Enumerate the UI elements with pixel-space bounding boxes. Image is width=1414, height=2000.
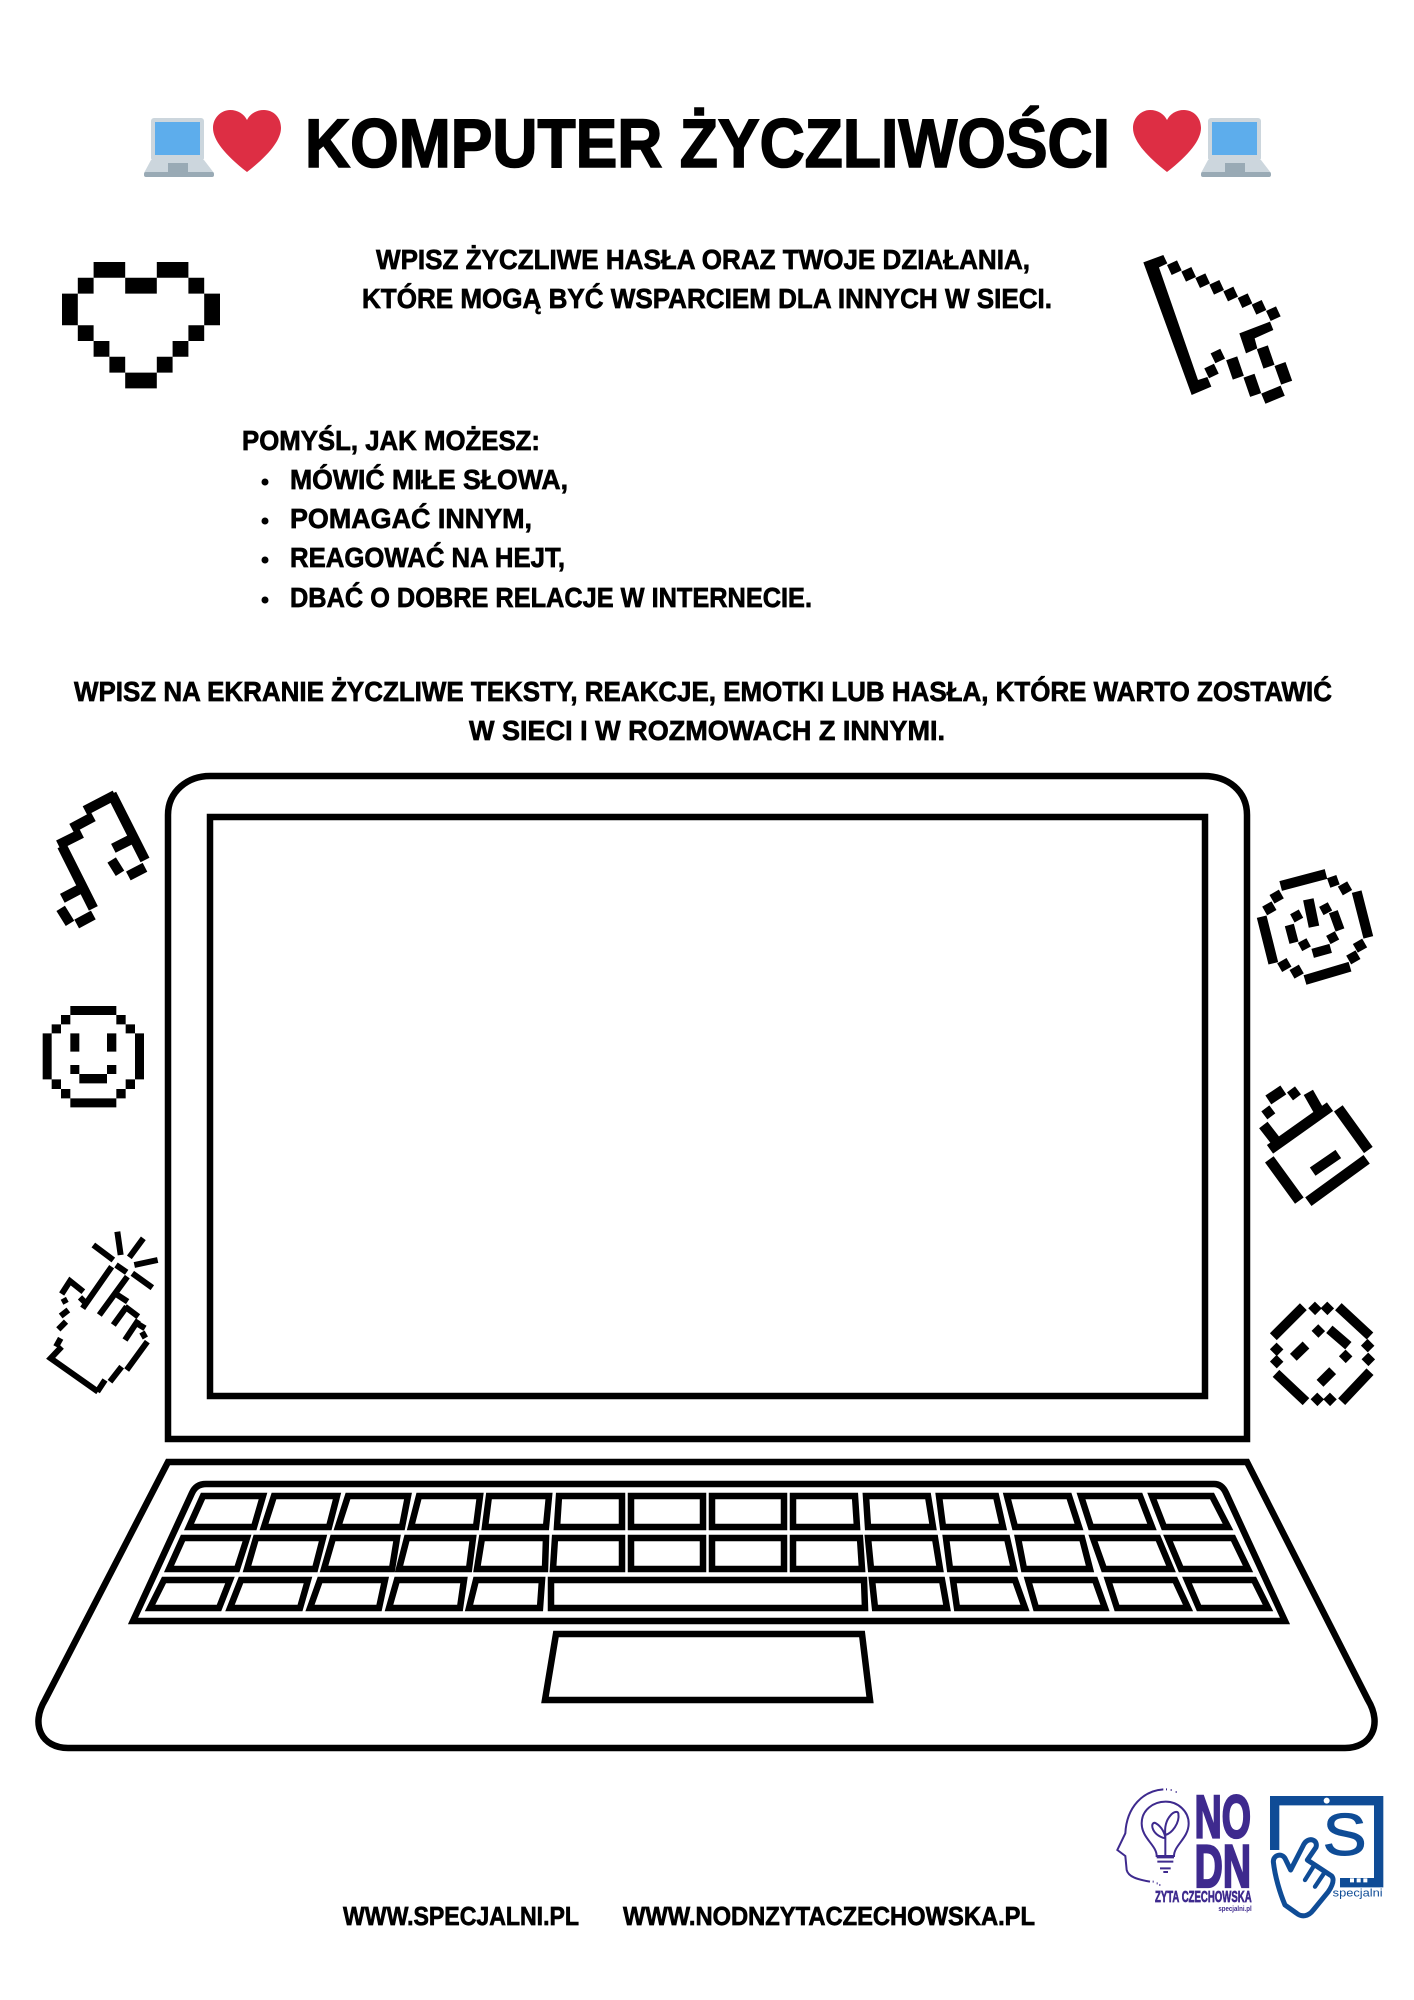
logo wordmark NO DN	[1155, 1784, 1252, 1913]
footer website addresses	[343, 1901, 1035, 1931]
laptop lid	[168, 776, 1247, 1439]
list: think how you can: POMAGAĆ INNYM,	[290, 503, 532, 534]
head outline and light bulb	[1117, 1789, 1189, 1885]
tablet frame	[1275, 1801, 1379, 1883]
keyboard keys row 2	[169, 1538, 1248, 1569]
logo: NO DN Zyta Czechowska	[1117, 1784, 1252, 1913]
logo caption: specjalni	[1333, 1888, 1383, 1900]
intro instruction text: WPISZ ŻYCZLIWE HASŁA ORAZ TWOJE DZIAŁANIA,	[376, 244, 1030, 275]
icon: pixel cursor	[1143, 255, 1287, 399]
intro instruction text	[362, 244, 1052, 314]
icon: pixel octagon face	[1273, 1305, 1372, 1403]
title with emoji	[144, 105, 1271, 182]
list: think how you can: POMYŚL, JAK MOŻESZ:	[242, 425, 540, 456]
icon: heart emoji right	[1133, 110, 1201, 172]
screen instruction text: W SIECI I W ROZMOWACH Z INNYMI.	[469, 715, 945, 746]
hand	[1273, 1840, 1333, 1916]
list: think how you can: MÓWIĆ MIŁE SŁOWA,	[290, 464, 568, 495]
logo wordmark NO DN: ZYTA CZECHOWSKA	[1155, 1889, 1252, 1906]
footer website addresses: WWW.NODNZYTACZECHOWSKA.PL	[623, 1901, 1035, 1931]
icon: pixel padlock	[1263, 1090, 1368, 1202]
footer website addresses: WWW.SPECJALNI.PL	[343, 1901, 579, 1931]
title text: KOMPUTER ŻYCZLIWOŚCI	[305, 105, 1110, 182]
laptop base	[38, 1462, 1375, 1748]
touchpad	[545, 1634, 870, 1700]
laptop illustration	[38, 776, 1375, 1748]
icon: pixel power smiley	[1262, 874, 1368, 980]
icon: pixel smiley	[43, 1006, 144, 1107]
icon: heart emoji left	[213, 110, 281, 172]
logo wordmark NO DN: NO	[1195, 1784, 1251, 1851]
icon: pixel clicking hand	[51, 1232, 158, 1392]
list: think how you can: DBAĆ O DOBRE RELACJE W INTERNECIE.	[290, 582, 812, 613]
list: think how you can: REAGOWAĆ NA HEJT,	[290, 542, 565, 573]
icon: pixel music note	[58, 794, 145, 924]
icon: pixel heart	[62, 262, 220, 388]
list: think how you can	[242, 425, 812, 613]
keyboard keys row 3 with space bar	[150, 1580, 1268, 1608]
icon: laptop emoji right	[1201, 118, 1271, 177]
letter S: S	[1323, 1801, 1367, 1868]
laptop screen	[210, 817, 1205, 1396]
screen instruction text: WPISZ NA EKRANIE ŻYCZLIWE TEKSTY, REAKCJE, EMOTKI LUB HASŁA, KTÓRE WARTO ZOSTAWIĆ	[74, 676, 1332, 707]
logo: specjalni	[1273, 1798, 1383, 1916]
screen instruction text	[74, 676, 1332, 746]
logo wordmark NO DN: DN	[1195, 1833, 1251, 1900]
logo wordmark NO DN: specjalni.pl	[1218, 1906, 1252, 1913]
keyboard frame	[133, 1484, 1285, 1621]
keyboard keys row 1	[189, 1496, 1228, 1527]
icon: laptop emoji left	[144, 118, 214, 177]
intro instruction text: KTÓRE MOGĄ BYĆ WSPARCIEM DLA INNYCH W SIECI.	[362, 283, 1052, 314]
